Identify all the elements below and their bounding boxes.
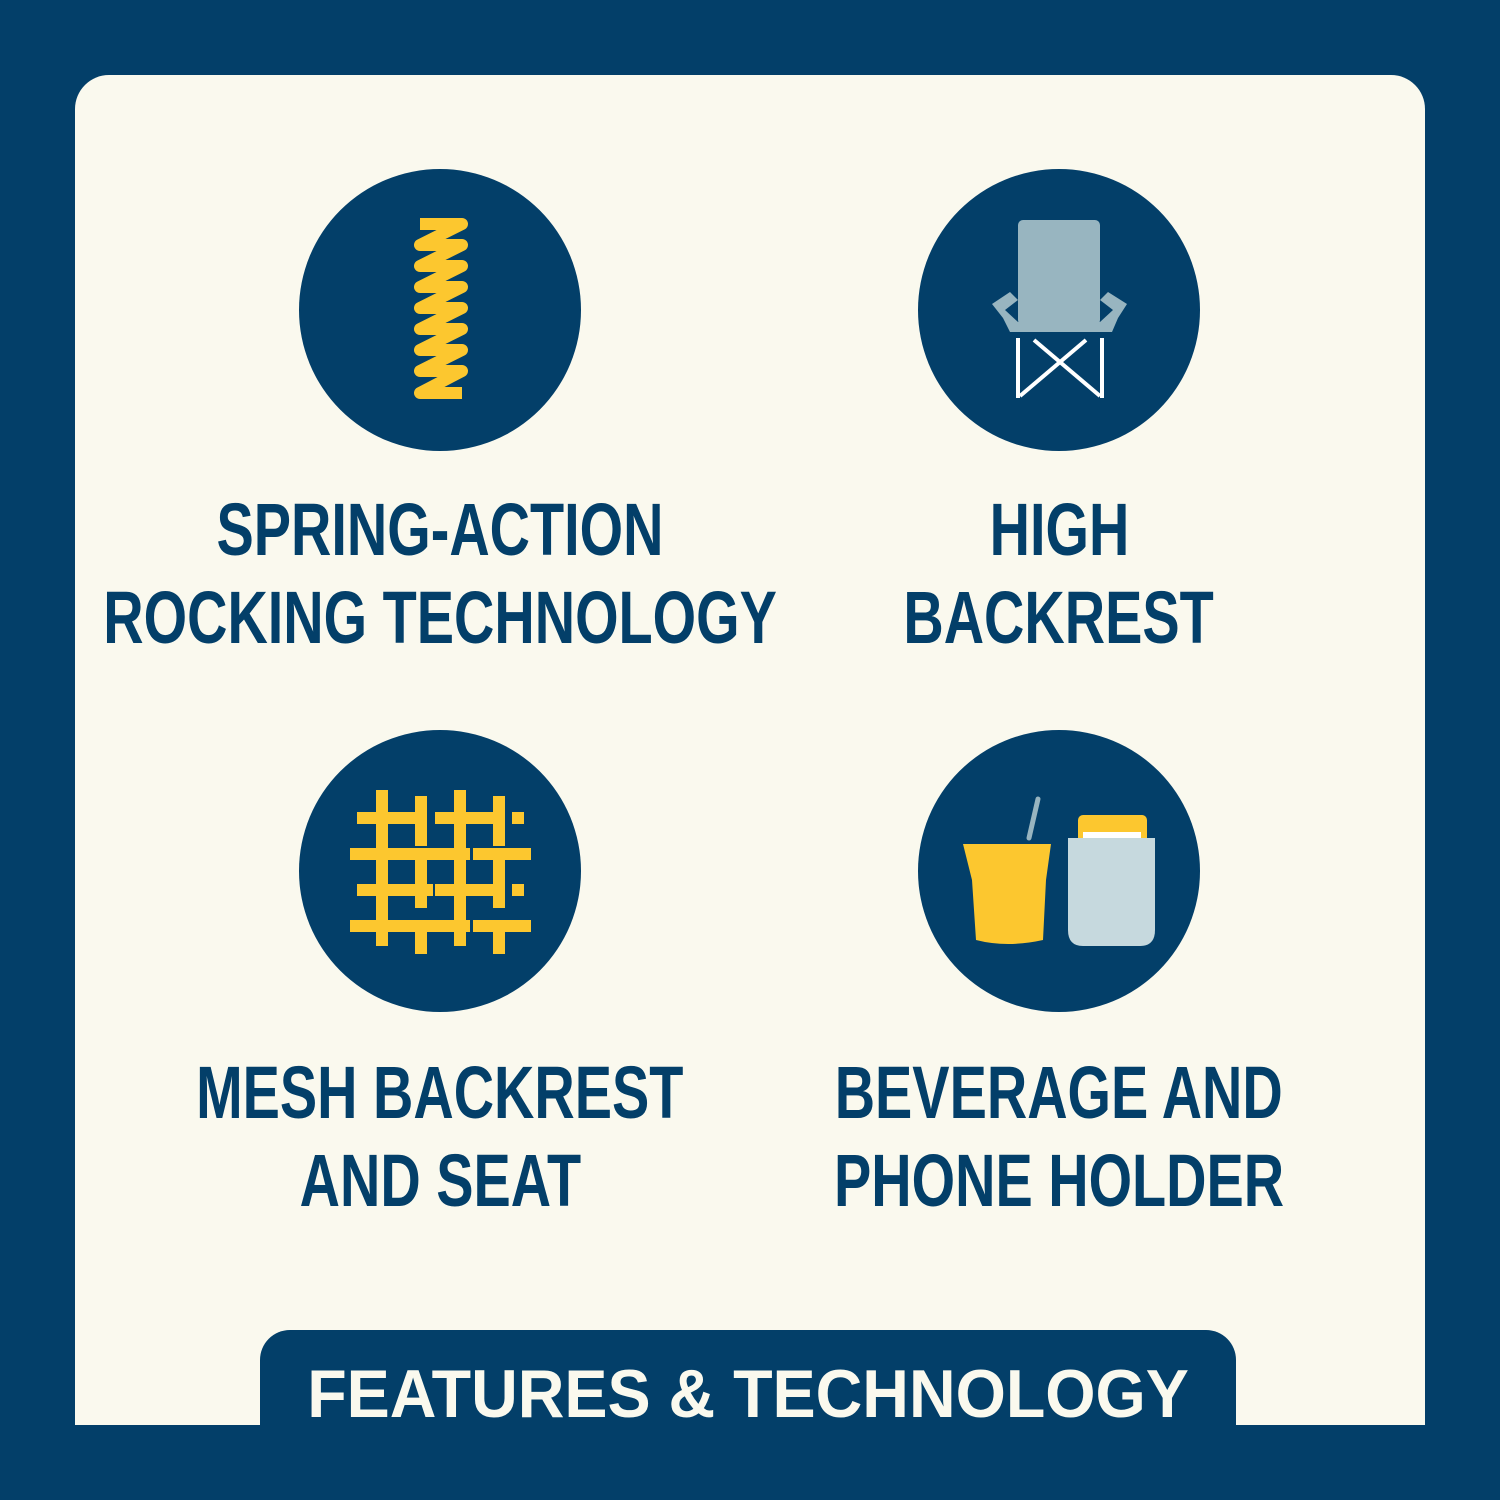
text: mesh backrest and seat: [196, 1051, 684, 1222]
text: beverage and phone holder: [834, 1051, 1284, 1222]
icon: high backrest chair: [918, 169, 1200, 451]
icon: beverage and phone: [918, 730, 1200, 1012]
text: high backrest: [904, 488, 1214, 659]
text: high backrest: BACKREST: [904, 576, 1214, 659]
icon: mesh: [299, 730, 581, 1012]
text: spring-action rocking technology: ROCKING TECHNOLOGY: [103, 576, 777, 659]
title tab: features & technology: FEATURES & TECHNOLOGY: [307, 1356, 1189, 1432]
text: spring-action rocking technology: [103, 488, 777, 659]
title tab: features & technology: [260, 1330, 1236, 1500]
text: beverage and phone holder: BEVERAGE AND: [835, 1051, 1283, 1134]
text: mesh backrest and seat: AND SEAT: [299, 1139, 581, 1222]
icon: spring: [299, 169, 581, 451]
text: spring-action rocking technology: SPRING-ACTION: [217, 488, 663, 571]
text: beverage and phone holder: PHONE HOLDER: [834, 1139, 1284, 1222]
text: high backrest: HIGH: [989, 488, 1129, 571]
text: mesh backrest and seat: MESH BACKREST: [196, 1051, 684, 1134]
